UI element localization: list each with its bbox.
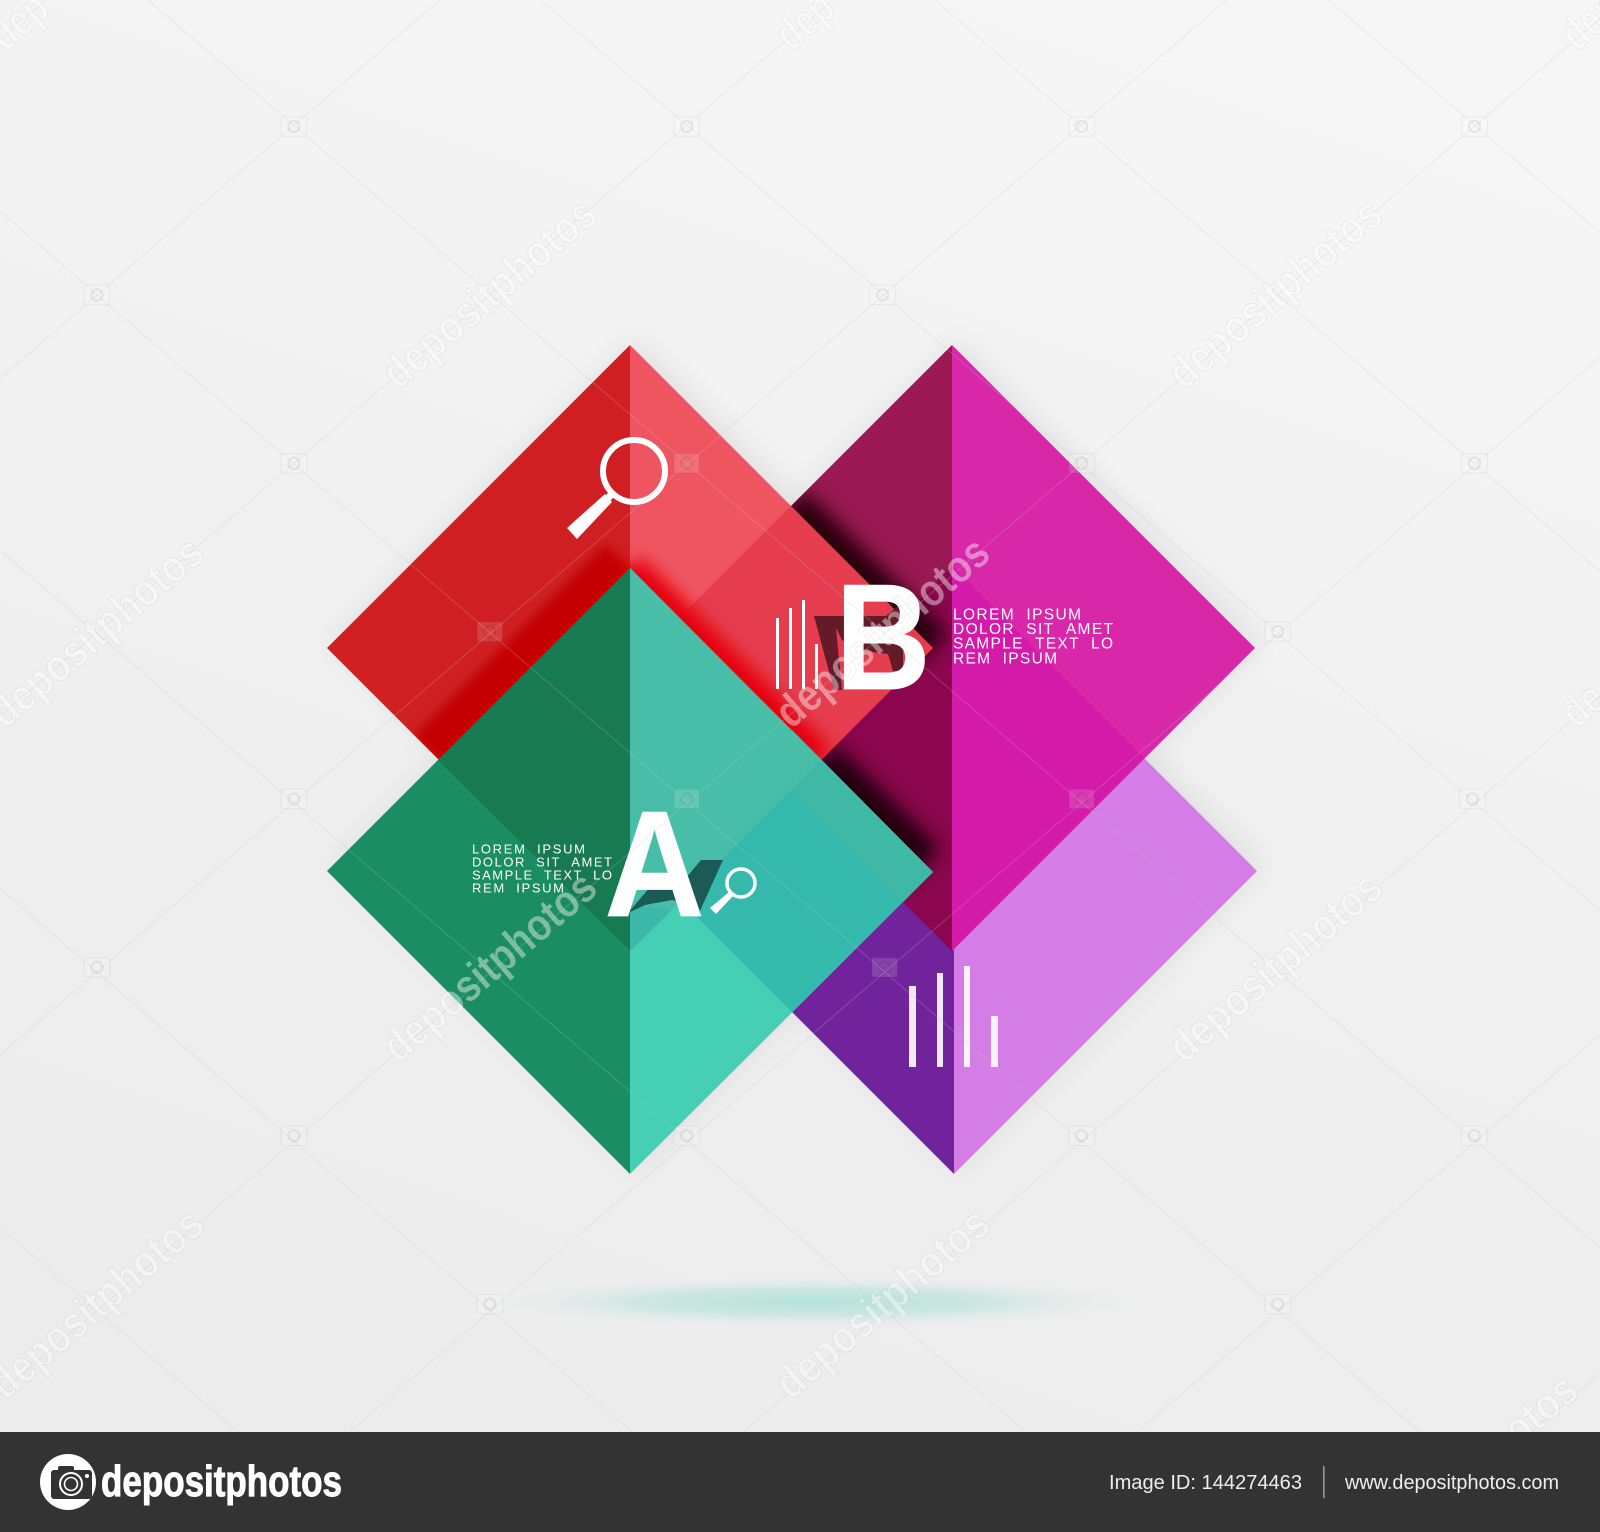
panel: green diamond [327,568,933,1174]
letter B: B [836,552,930,721]
text block: lorem ipsum A: SAMPLE TEXT LO [472,867,612,882]
watermark text: depositphotos [1157,187,1392,399]
logo wordmark: depositphotos [101,1457,342,1506]
icon: bar chart purple [909,966,998,1067]
icon: bar chart B [776,600,818,689]
watermark text: depositphotos [1157,861,1392,1072]
footer bar [0,1432,1600,1532]
icon: small magnifier [710,869,755,914]
watermark text: depositphotos [765,526,999,737]
panel: red diamond [327,345,933,760]
watermark text: depositphotos [372,861,606,1072]
text block: lorem ipsum A: DOLOR SIT AMET [472,854,612,869]
watermark text: depositphotos [765,1197,999,1409]
ground shadow [470,1275,1160,1329]
panel: purple diamond [651,568,1257,1174]
text block: lorem ipsum B: LOREM IPSUM [953,606,1081,623]
letter shadow A [628,860,723,913]
text block: lorem ipsum B: DOLOR SIT AMET [953,621,1114,638]
text block: lorem ipsum B: REM IPSUM [953,650,1057,667]
text block: lorem ipsum A: REM IPSUM [472,880,564,895]
diamond soft halo [333,339,1263,1168]
watermark text: otos [1492,1363,1588,1455]
logo icon: camera [40,1454,96,1510]
watermark text: depositphotos [372,187,606,399]
website url: www.depositphotos.com [1344,1472,1559,1494]
text block: lorem ipsum B [953,606,1114,667]
text block: lorem ipsum A: LOREM IPSUM [472,841,585,856]
image id: Image ID: 144274463 [1109,1472,1302,1494]
panel: magenta diamond [791,345,1255,951]
text block: lorem ipsum B: SAMPLE TEXT LO [953,636,1113,653]
text block: lorem ipsum A [472,841,612,895]
icon: large magnifier [567,440,665,539]
footer separator [1323,1466,1325,1498]
watermark camera icons [84,117,1487,1314]
letter A: A [604,779,704,948]
letter shadow B [814,602,903,690]
